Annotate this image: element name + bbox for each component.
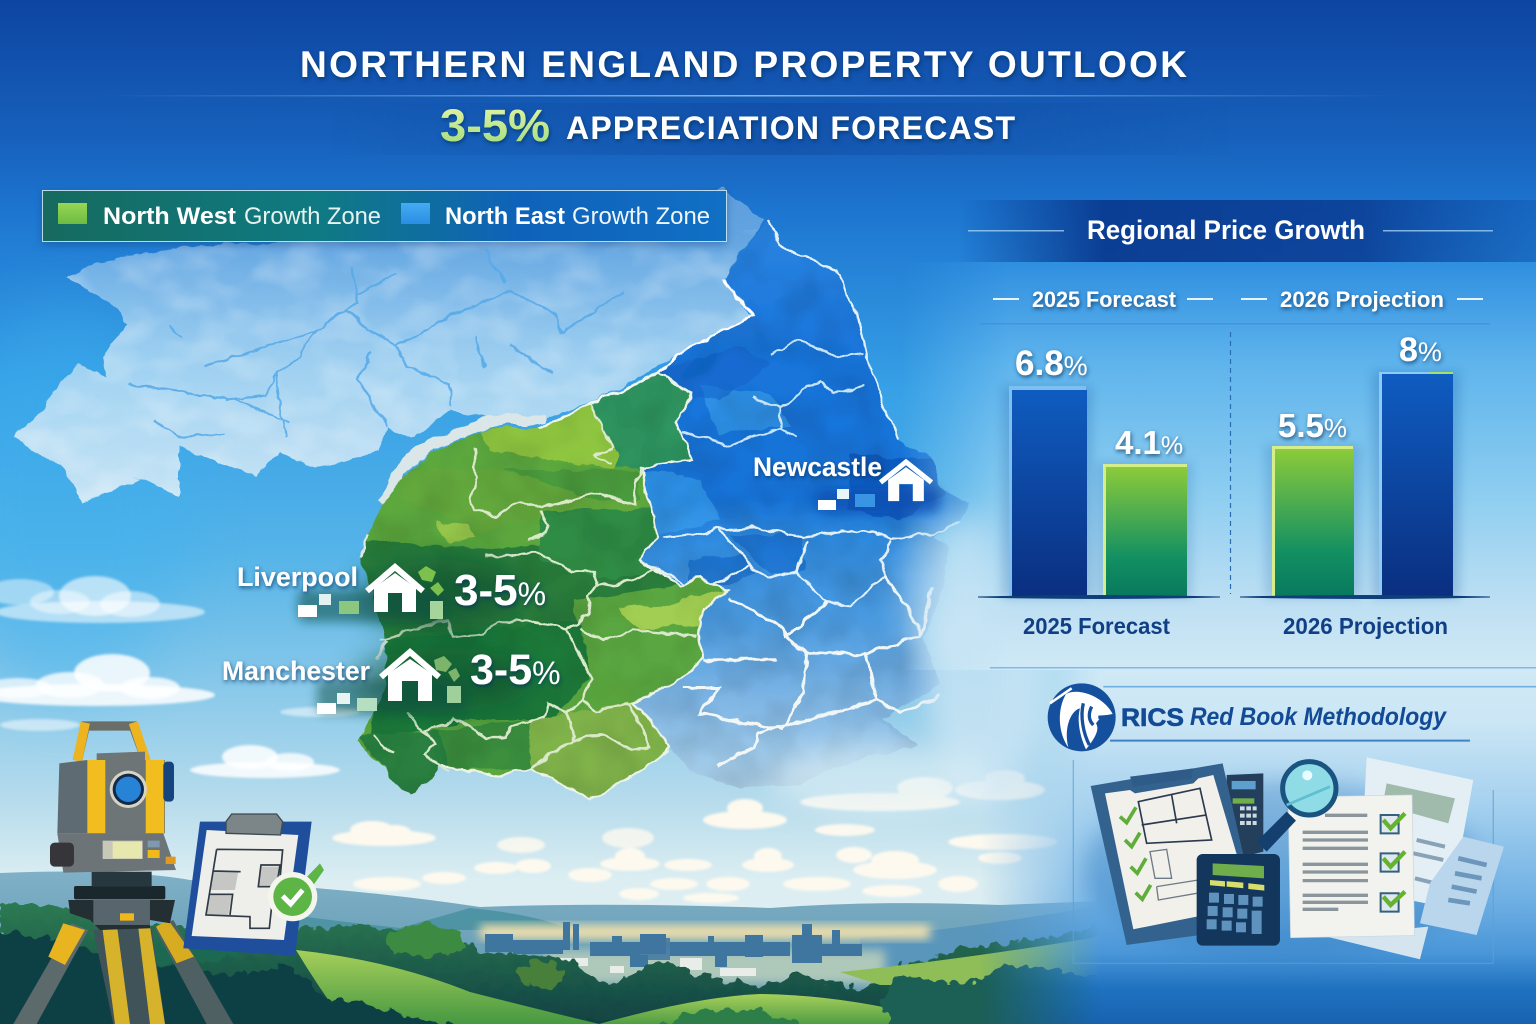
focus knob (50, 843, 74, 867)
2025 column heading: 2025 Forecast (1032, 287, 1177, 312)
map: North West growth zone (350, 370, 740, 810)
bar: 2026 North West 5.5% (1265, 407, 1361, 598)
clipboard with checks (1091, 763, 1275, 945)
marker: Newcastle (753, 452, 940, 513)
marker: Newcastle: Newcastle (753, 452, 882, 482)
back documents (1327, 757, 1504, 959)
lens (110, 771, 147, 808)
clouds lower band (332, 770, 1058, 903)
approval check badge (268, 863, 324, 921)
region borders green (373, 403, 697, 773)
horizon glow (480, 925, 930, 939)
marker: Manchester (222, 646, 561, 714)
north west legend item (58, 203, 381, 230)
2026 column heading: 2026 Projection (1280, 287, 1444, 312)
marker: Liverpool: 3-5% (454, 566, 546, 615)
region borders blue (640, 340, 960, 767)
pale map: Scotland (14, 186, 764, 504)
map: North East growth zone (620, 215, 980, 795)
right chart panel wash (880, 262, 1536, 670)
bar: 2025 North East 6.8% (1002, 344, 1092, 598)
soft fade on the east of the map (925, 510, 1045, 810)
x axis label 2025: 2025 Forecast (1023, 613, 1170, 639)
RICS Red Book Methodology heading: Red Book Methodology (1190, 703, 1447, 731)
panel frame (1073, 760, 1493, 963)
subtitle line (440, 100, 1015, 151)
distant hills (0, 872, 1130, 1024)
bar: 2025 North West 4.1%: 4.1% (1115, 424, 1183, 461)
north west legend item: North West (103, 203, 236, 230)
forest (0, 905, 1110, 1024)
tonal patches green (592, 374, 690, 470)
marker: Manchester: Manchester (222, 656, 370, 686)
north east legend item (401, 203, 710, 230)
landscape (0, 872, 1130, 1024)
tripod legs (13, 920, 233, 1024)
near trees (0, 930, 1100, 1024)
body (57, 760, 165, 833)
subtitle line: 3-5% (440, 100, 550, 151)
bar: 2025 North East 6.8%: 6.8% (1015, 344, 1088, 383)
icon: RICS methodology documents (1048, 683, 1536, 963)
bar: 2026 North East 8%: 8% (1399, 331, 1442, 369)
icon: surveyor total station on tripod (13, 723, 324, 1024)
RICS Red Book Methodology heading: RICS (1121, 704, 1184, 732)
chart: Regional Price Growth (960, 200, 1536, 639)
title band (100, 44, 1400, 155)
pale map river channels (128, 250, 622, 437)
magnifying glass (1257, 762, 1336, 852)
marker: Liverpool: Liverpool (237, 562, 358, 592)
clipboard with floor plan (183, 814, 324, 956)
checklist document (1288, 795, 1415, 938)
north west legend item: Growth Zone (244, 203, 381, 230)
calculator front (1197, 854, 1280, 946)
bar: 2026 North West 5.5%: 5.5% (1278, 407, 1347, 444)
north east legend item: North East (445, 203, 565, 230)
chart heading (960, 200, 1536, 262)
north east legend item: Growth Zone (572, 203, 710, 230)
chart heading: Regional Price Growth (1087, 215, 1365, 245)
clouds behind the map (0, 576, 360, 778)
marker: Manchester: 3-5% (470, 646, 561, 694)
instrument head (68, 900, 175, 930)
base with display (57, 833, 176, 873)
subtitle line: APPRECIATION FORECAST (566, 110, 1015, 146)
dark shading around west city labels (360, 560, 520, 630)
carry handle (77, 726, 146, 761)
title line: NORTHERN ENGLAND PROPERTY OUTLOOK (300, 44, 1187, 85)
calculator back (1227, 773, 1263, 857)
bar: 2025 North West 4.1% (1096, 424, 1192, 598)
city skyline (485, 922, 885, 984)
RICS lion logo (1048, 683, 1116, 751)
tonal patches (640, 385, 790, 535)
x axis label 2026: 2026 Projection (1283, 613, 1448, 639)
bar: 2026 North East 8% (1372, 331, 1460, 598)
legend (42, 190, 726, 242)
green hills (296, 950, 625, 1024)
bottom right panel wash (960, 668, 1536, 1024)
shadow (1083, 780, 1483, 960)
marker: Liverpool (237, 562, 546, 622)
